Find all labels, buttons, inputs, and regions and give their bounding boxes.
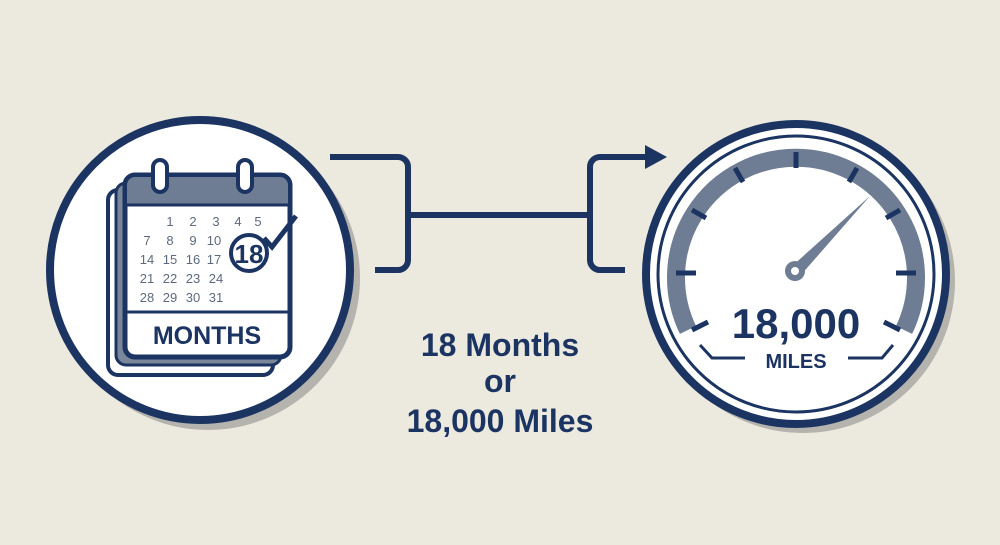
- icon: calendar: 24: [209, 271, 223, 286]
- text block: caption: 18 Months: [421, 327, 579, 363]
- text block: caption: 18,000 Miles: [407, 403, 593, 439]
- icon: calendar: 8: [166, 233, 174, 248]
- icon: calendar: 21: [140, 271, 154, 286]
- gauge arc: [676, 158, 916, 330]
- icon: calendar: 1: [166, 214, 174, 229]
- icon: circled 18 with check: [231, 216, 296, 271]
- icon: circled 18 with check: 18: [235, 239, 263, 269]
- icon: calendar: 15: [163, 252, 177, 267]
- icon: calendar: 2: [189, 214, 197, 229]
- icon: calendar: 5: [254, 214, 262, 229]
- icon: calendar: 3: [212, 214, 220, 229]
- icon: calendar: 23: [186, 271, 200, 286]
- text block: caption: or: [484, 363, 516, 399]
- icon: calendar: 30: [186, 290, 200, 305]
- icon: calendar: 31: [209, 290, 223, 305]
- icon: calendar: 29: [163, 290, 177, 305]
- icon: calendar: 10: [207, 233, 221, 248]
- icon: calendar: 4: [234, 214, 242, 229]
- panel: speedometer circle: MILES: [765, 351, 827, 373]
- arrow: connector: [330, 145, 667, 270]
- panel: months circle: [50, 120, 360, 430]
- icon: calendar: MONTHS: [153, 322, 261, 350]
- icon: calendar: 14: [140, 252, 154, 267]
- panel: speedometer circle: [646, 124, 955, 433]
- text block: caption: [407, 327, 593, 439]
- icon: calendar: 16: [186, 252, 200, 267]
- icon: calendar: [108, 160, 296, 375]
- needle: [790, 196, 870, 276]
- icon: calendar: 7: [143, 233, 151, 248]
- icon: calendar: 28: [140, 290, 154, 305]
- icon: calendar: 22: [163, 271, 177, 286]
- icon: calendar: 17: [207, 252, 221, 267]
- panel: speedometer circle: 18,000: [732, 300, 860, 347]
- icon: calendar: 9: [189, 233, 197, 248]
